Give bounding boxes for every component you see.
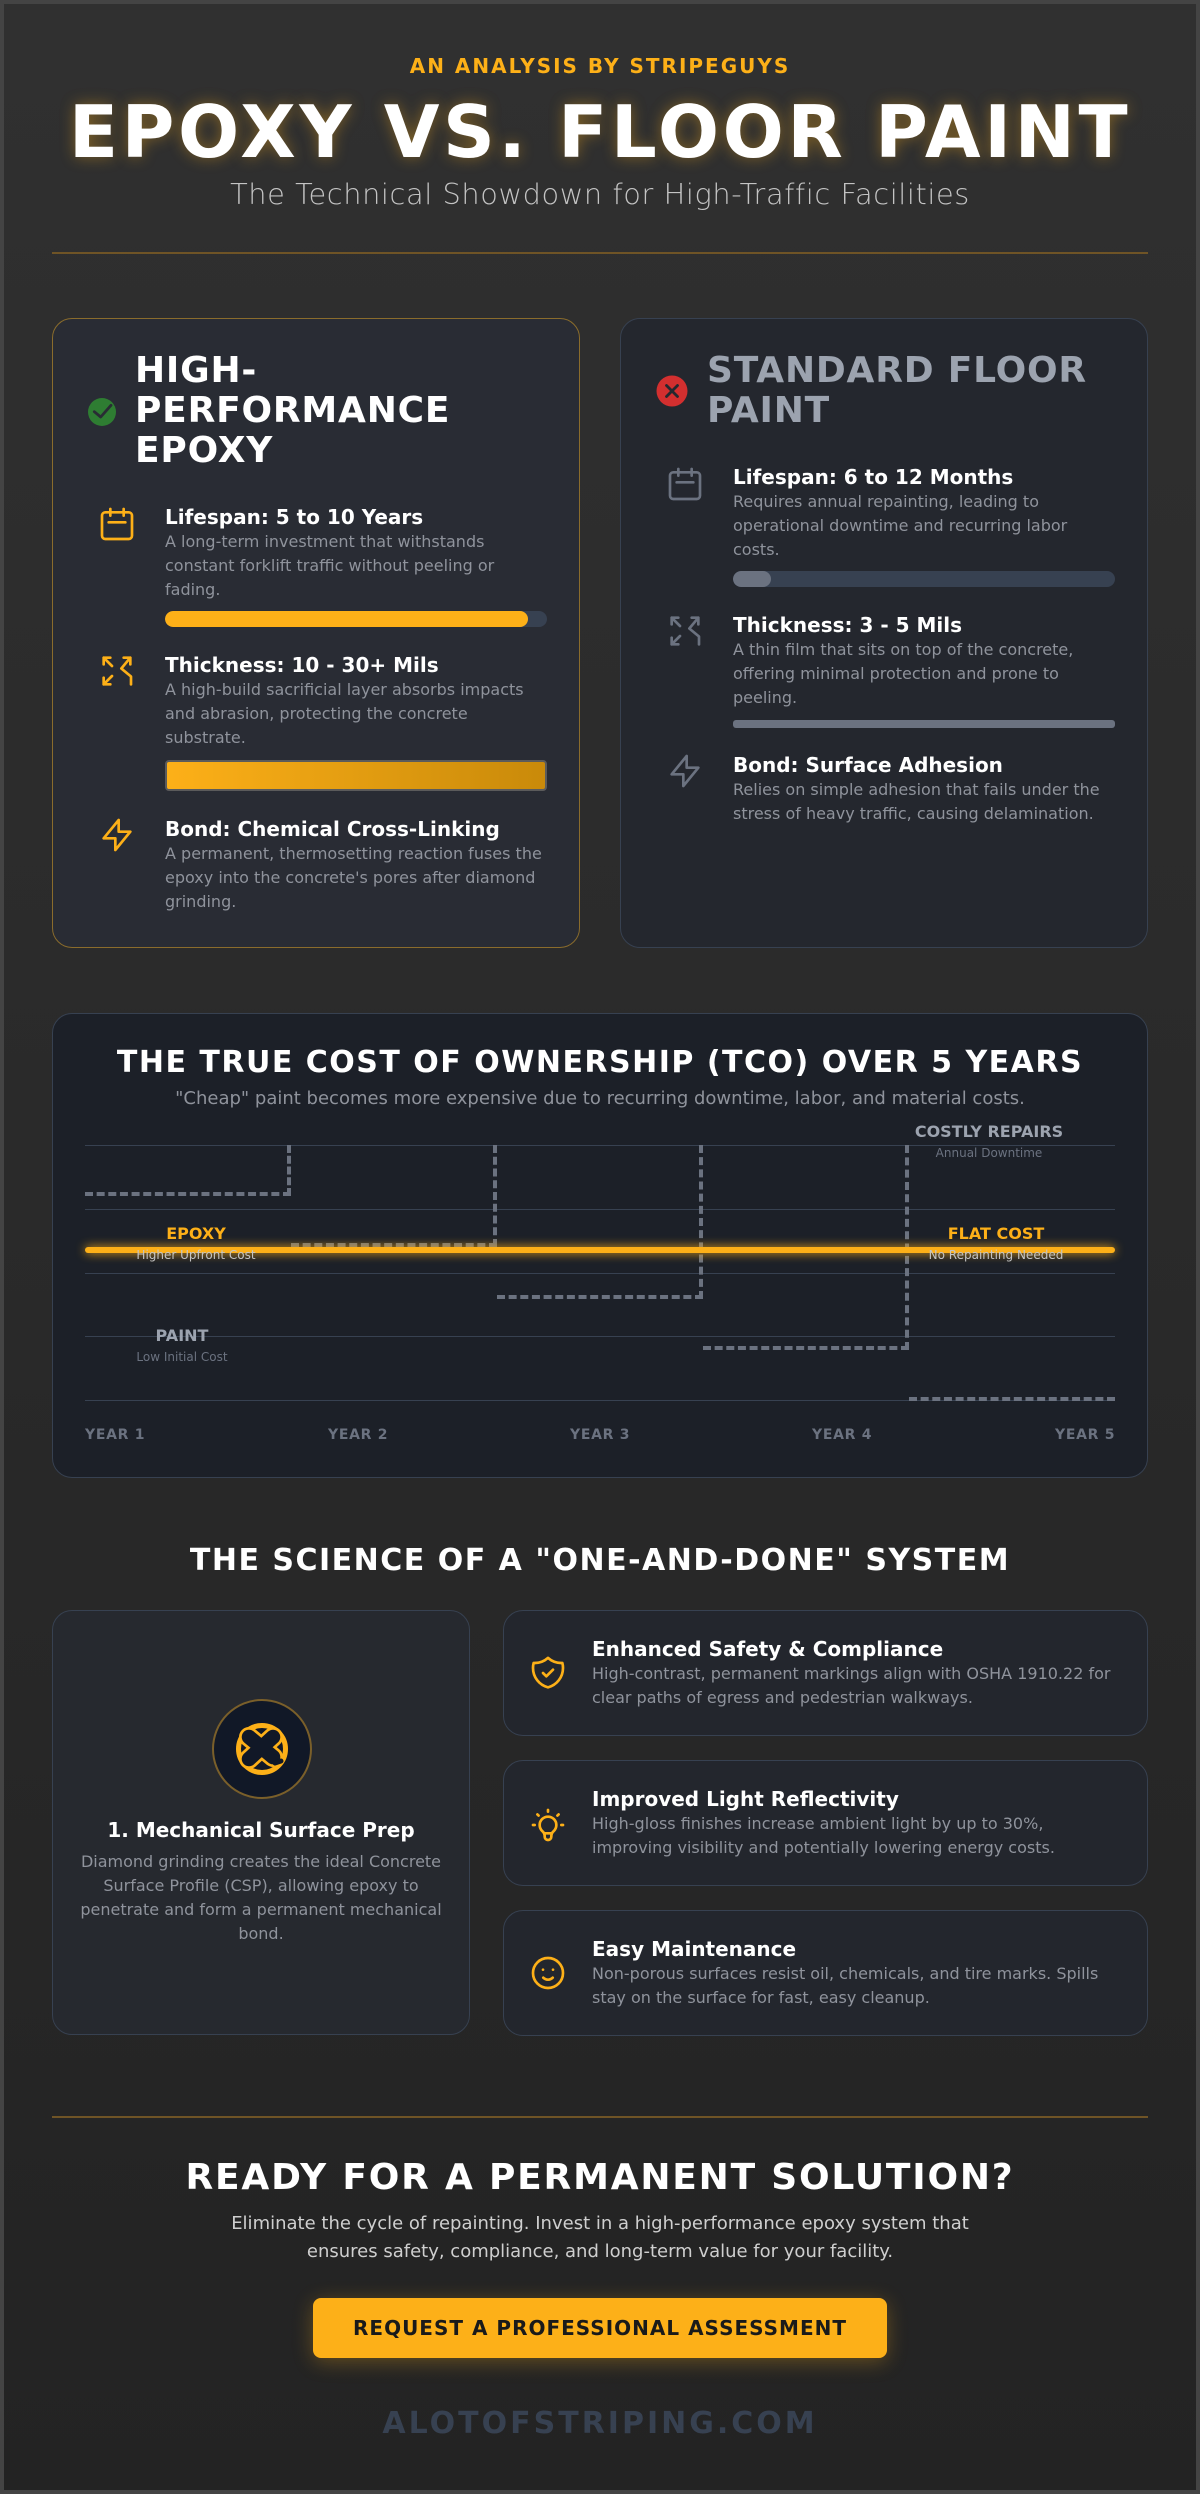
icon: shield [532,1656,564,1689]
thickness text [165,680,524,747]
TCO subtitle: "Cheap" paint becomes more expensive due to recurring downtime, labor, and material costs. [175,1088,1025,1109]
bond text: stress of heavy traffic, causing delamination. [733,804,1094,823]
panel: TCO chart [52,1013,1148,1478]
lifespan heading: Lifespan: 5 to 10 Years [165,505,423,529]
lifespan text: operational downtime and recurring labor [733,516,1067,535]
prep text: Diamond grinding creates the ideal Concrete [81,1852,441,1871]
thickness text: and abrasion, protecting the concrete [165,704,468,723]
heading: epoxy: HIGH- [135,350,257,391]
chart x axis: YEAR 3 [570,1427,630,1443]
lifespan text: costs. [733,540,780,559]
paint cost steps [85,1145,1115,1401]
repairs note: Annual Downtime [936,1146,1042,1160]
bond text [733,780,1100,823]
maintenance text: stay on the surface for fast, easy cleanup. [592,1988,930,2007]
lifespan text [165,532,494,599]
lifespan text: Requires annual repainting, leading to [733,492,1039,511]
flat cost name: FLAT COST [948,1224,1044,1243]
cta button [313,2298,887,2358]
thickness heading: Thickness: 10 - 30+ Mils [165,653,439,677]
epoxy item: thickness [102,653,547,791]
thickness text [733,640,1073,707]
safety text: High-contrast, permanent markings align with OSHA 1910.22 for [592,1664,1110,1683]
cost chart [79,1145,1121,1401]
heading: epoxy: EPOXY [135,430,273,471]
icon: calendar [668,468,702,500]
panel: standard floor paint [620,318,1148,948]
chart x axis: YEAR 4 [812,1427,872,1443]
cta text [231,2213,969,2262]
heading: paint: PAINT [707,390,830,431]
paint item: bond [670,753,1100,823]
icon: bolt [102,818,132,852]
thickness bar [165,760,547,791]
panel: high-performance epoxy [52,318,580,948]
thickness text: A high-build sacrificial layer absorbs impacts [165,680,524,699]
safety text [592,1664,1110,1707]
icon: red x [656,376,688,406]
paint item: thickness [670,613,1115,728]
bond text: grinding. [165,892,236,911]
paint name: PAINT [156,1326,208,1345]
lifespan text: A long-term investment that withstands [165,532,484,551]
prep text [80,1852,442,1943]
lifespan text: constant forklift traffic without peeling or [165,556,494,575]
lifespan bar [165,611,547,627]
paint note: Low Initial Cost [136,1350,228,1364]
panel: light [503,1760,1148,1886]
header divider [52,252,1148,254]
cta heading: READY FOR A PERMANENT SOLUTION? [186,2157,1014,2198]
icon: grinding disc [212,1699,312,1799]
flat cost note: No Repainting Needed [929,1248,1063,1262]
thickness text: offering minimal protection and prone to [733,664,1059,683]
cta text: Eliminate the cycle of repainting. Invest in a high-performance epoxy system that [231,2213,969,2234]
TCO heading: THE TRUE COST OF OWNERSHIP (TCO) OVER 5 YEARS [117,1045,1083,1080]
science heading: THE SCIENCE OF A "ONE-AND-DONE" SYSTEM [190,1543,1010,1578]
cta text: ensures safety, compliance, and long-term value for your facility. [307,2241,893,2262]
maintenance text: Non-porous surfaces resist oil, chemicals, and tire marks. Spills [592,1964,1098,1983]
maintenance heading: Easy Maintenance [592,1937,796,1961]
prep text: penetrate and form a permanent mechanical [80,1900,442,1919]
icon: expand arrows [102,656,132,686]
safety text: clear paths of egress and pedestrian walkways. [592,1688,973,1707]
thickness bar [733,720,1115,728]
prep text: bond. [238,1924,284,1943]
epoxy flat line [85,1247,1115,1253]
bond text [165,844,542,911]
icon: green check [88,398,116,426]
subtitle: The Technical Showdown for High-Traffic Facilities [230,177,970,211]
panel: mechanical surface prep [52,1610,470,2035]
icon: calendar [100,508,134,540]
eyebrow: AN ANALYSIS BY STRIPEGUYS [410,54,790,78]
bond text: epoxy into the concrete's pores after diamond [165,868,535,887]
repairs name: COSTLY REPAIRS [915,1122,1063,1141]
bond text: A permanent, thermosetting reaction fuses the [165,844,542,863]
icon: expand arrows [670,616,700,646]
epoxy item: bond [102,817,542,911]
chart x axis: YEAR 5 [1055,1427,1115,1443]
chart x axis: YEAR 1 [85,1427,145,1443]
icon: smile [532,1956,564,1990]
call to action [186,2157,1014,2441]
epoxy note: Higher Upfront Cost [136,1248,256,1262]
thickness text: A thin film that sits on top of the concrete, [733,640,1073,659]
light text: High-gloss finishes increase ambient light by up to 30%, [592,1814,1043,1833]
lifespan text: fading. [165,580,220,599]
prep heading: 1. Mechanical Surface Prep [107,1818,415,1842]
thickness heading: Thickness: 3 - 5 Mils [733,613,962,637]
bond heading: Bond: Surface Adhesion [733,753,1003,777]
heading: paint [707,350,1087,431]
light text: improving visibility and potentially lowering energy costs. [592,1838,1055,1857]
lifespan text [733,492,1068,559]
title: EPOXY VS. FLOOR PAINT [69,90,1131,174]
label: costly repairs [915,1122,1063,1160]
prep text: Surface Profile (CSP), allowing epoxy to [103,1876,419,1895]
panel: safety [503,1610,1148,1736]
epoxy item: lifespan [100,505,547,627]
footer divider [52,2116,1148,2118]
lifespan heading: Lifespan: 6 to 12 Months [733,465,1013,489]
thickness text: peeling. [733,688,797,707]
icon: bolt [670,754,700,788]
maintenance text [592,1964,1098,2007]
heading: epoxy: PERFORMANCE [135,390,450,431]
light heading: Improved Light Reflectivity [592,1787,899,1811]
heading: epoxy [135,350,450,471]
chart x axis: YEAR 2 [328,1427,388,1443]
paint item: lifespan [668,465,1115,587]
label: paint [136,1326,228,1364]
panel: maintenance [503,1910,1148,2036]
safety heading: Enhanced Safety & Compliance [592,1637,943,1661]
label: flat cost [929,1224,1063,1262]
lifespan bar [733,571,1115,587]
website: ALOTOFSTRIPING.COM [382,2406,818,2441]
bond text: Relies on simple adhesion that fails under the [733,780,1100,799]
icon: lightbulb [532,1808,564,1842]
cta button: REQUEST A PROFESSIONAL ASSESSMENT [353,2316,847,2340]
epoxy name: EPOXY [166,1224,226,1243]
light text [592,1814,1055,1857]
bond heading: Bond: Chemical Cross-Linking [165,817,500,841]
thickness text: substrate. [165,728,246,747]
header [67,54,1133,211]
label: epoxy [136,1224,256,1262]
heading: paint: STANDARD FLOOR [707,350,1087,391]
chart x axis [85,1427,1115,1443]
